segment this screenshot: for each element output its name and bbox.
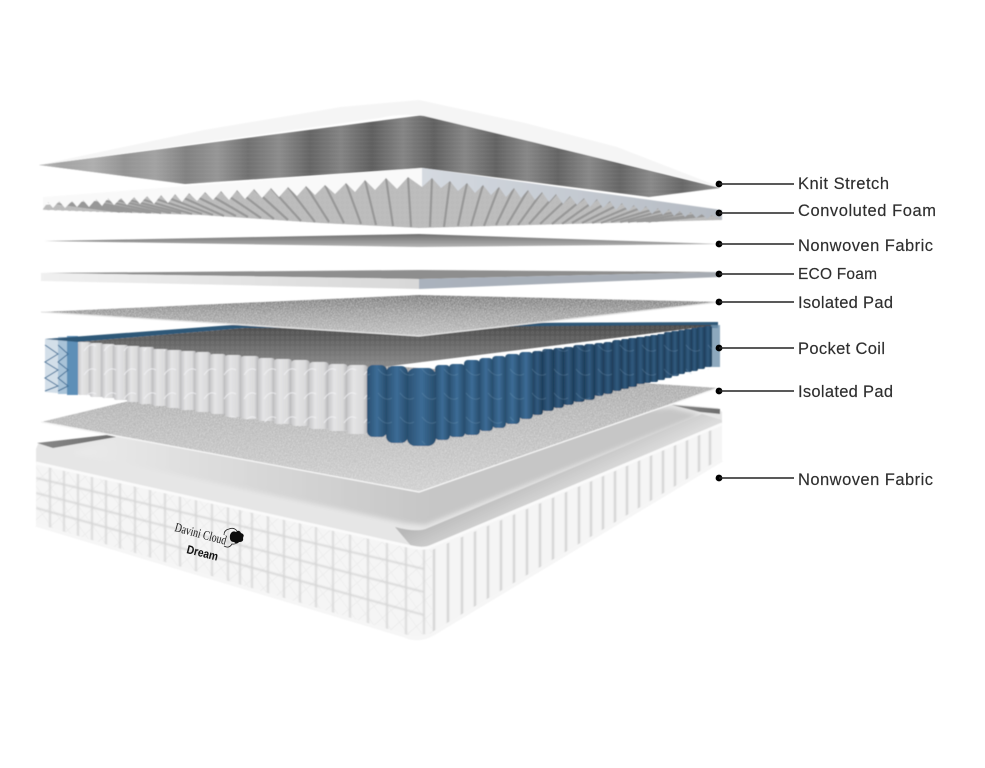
base mattress: [30, 400, 730, 645]
mattress exploded illustration: [30, 100, 730, 645]
label: Nonwoven Fabric: [716, 237, 933, 255]
label: Pocket Coil: [716, 340, 885, 358]
label: Isolated Pad lower: [716, 383, 893, 401]
white coil face: [78, 342, 368, 437]
label: Isolated Pad lower: Isolated Pad: [798, 383, 893, 401]
icon: cloud: [224, 528, 244, 547]
logo: Dream: Dream: [185, 542, 220, 564]
label: Isolated Pad: Isolated Pad: [798, 294, 893, 312]
isolated pad lower: [41, 360, 718, 492]
coil top surface: [78, 325, 718, 369]
logo: [173, 519, 244, 564]
label: Nonwoven Fabric lower: Nonwoven Fabric: [798, 471, 933, 489]
nonwoven fabric upper: [44, 234, 720, 247]
label: Isolated Pad: [716, 294, 893, 312]
label: Knit Stretch: [716, 175, 889, 193]
back blue edge: [45, 322, 718, 342]
label: Nonwoven Fabric: Nonwoven Fabric: [798, 237, 933, 255]
logo: Davini Cloud: Davini Cloud: [173, 519, 229, 548]
label: Convoluted Foam: [716, 202, 936, 220]
pocket coil layer: [45, 322, 720, 447]
label: ECO Foam: [716, 266, 877, 283]
label: Pocket Coil: Pocket Coil: [798, 340, 885, 358]
label: ECO Foam: ECO Foam: [798, 266, 877, 283]
label: Nonwoven Fabric lower: [716, 471, 933, 489]
left translucent coil end: [45, 336, 78, 395]
eco foam: [41, 270, 720, 289]
label: Convoluted Foam: Convoluted Foam: [798, 202, 936, 220]
label: Knit Stretch: Knit Stretch: [798, 175, 889, 193]
convoluted foam: [43, 168, 722, 230]
isolated pad upper: [41, 295, 720, 336]
blue coil face: [367, 325, 720, 447]
knit stretch: [39, 100, 720, 197]
